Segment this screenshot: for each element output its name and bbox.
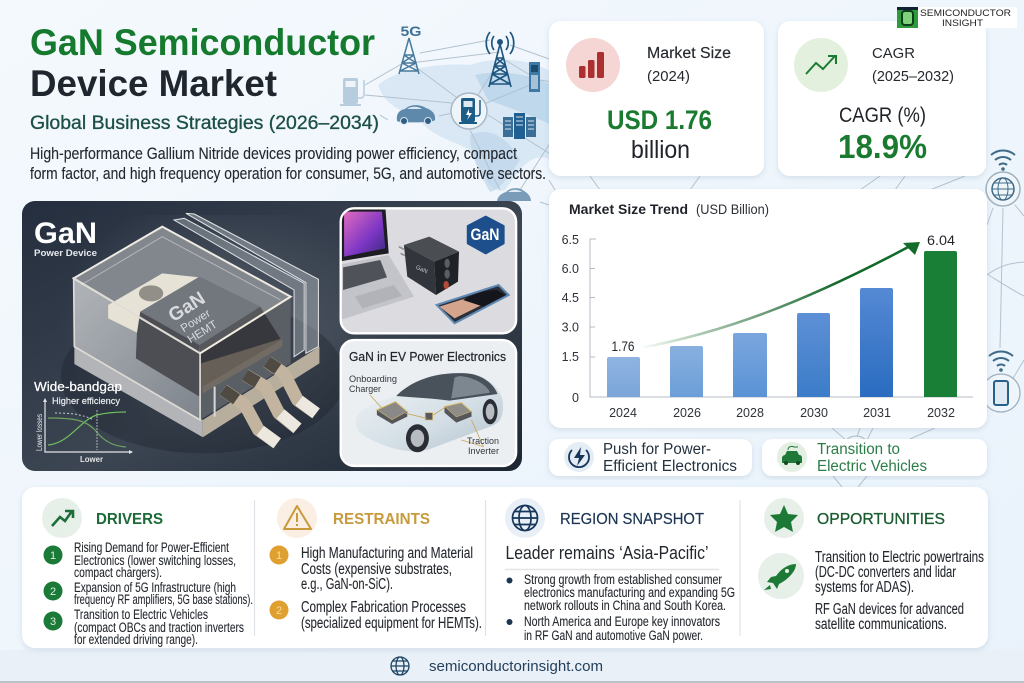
mini chart: wide-bandgap [34,380,133,464]
chip markings: Power [179,308,213,335]
driver list [74,540,253,647]
trend arrow [640,242,920,348]
icon: kiosk [529,62,540,92]
pill: electric vehicles: Transition to [817,441,900,458]
icon: rocket [758,553,804,599]
card: market size: USD 1.76 [607,105,712,135]
panel: consumer charger photo [338,207,516,333]
footer band [0,650,1024,683]
restraint list: Complex Fabrication Processes [301,599,466,616]
icon: car behind panel [497,188,531,201]
column: opportunities: satellite communications. [815,616,947,633]
partial hub behind chart [842,436,870,464]
pill: power-efficient electronics [549,439,752,476]
column: opportunities: RF GaN devices for advanced [815,601,964,618]
data labels [612,233,956,354]
title: GaN Semiconductor [30,22,375,63]
icon: wifi and globe node [986,150,1020,206]
logo: SEMICONDUCTOR [920,8,1011,19]
title [30,22,375,104]
description: form factor, and high frequency operation for consumer, 5G, and automotive sectors. [30,164,546,183]
icon: wifi and phone node [982,352,1020,412]
y axis labels: 0 [572,391,579,405]
subtitle: Global Business Strategies (2026–2034) [30,113,379,134]
restraint list: High Manufacturing and Material [301,545,473,562]
card: market size: Market Size [647,45,731,62]
badge and charger text: GaN [415,265,428,275]
restraint list: Costs (expensive substrates, [301,561,452,578]
panel: GaN power device visual [22,201,522,471]
driver list: Transition to Electric Vehicles [74,607,208,622]
pill: power-efficient electronics: Efficient Electronics [603,458,737,475]
chart card: market size trend: (USD Billion) [696,202,769,217]
panel: GaN in EV power electronics: Onboarding [349,374,397,385]
card: CAGR: (2025–2032) [872,68,954,85]
footer band: semiconductorinsight.com [429,659,603,675]
chip markings: GaN [165,288,209,327]
x axis labels [609,406,955,420]
number badges: 3 [50,616,56,628]
mini chart: wide-bandgap: Lower [80,454,104,464]
column: region snapshot: Strong growth from established consumer [524,572,722,587]
column: opportunities: systems for ADAS). [815,579,914,596]
data labels: 1.76 [612,339,634,354]
mini chart: wide-bandgap: Higher efficiency [52,396,120,407]
column: opportunities: OPPORTUNITIES [817,511,945,528]
card: CAGR: CAGR (%) [839,104,926,127]
icon: bar signal [566,38,620,92]
icon: 5G tower [399,23,422,74]
description: High-performance Gallium Nitride devices providing power efficiency, compact [30,144,517,163]
y axis labels: 3.0 [562,320,579,334]
driver list: compact chargers). [74,565,162,580]
panel: GaN in EV power electronics: Traction [467,436,499,447]
x axis labels: 2026 [673,406,701,420]
column: region snapshot: REGION SNAPSHOT [560,511,705,528]
column: region snapshot: North America and Europe key innovators [524,614,720,629]
panel: GaN in EV power electronics: Inverter [468,446,499,457]
y axis labels: 6.0 [562,262,579,276]
badge and charger text: GaN [470,225,500,244]
icon: electric car [777,442,807,472]
panel: GaN in EV power electronics: Charger [349,384,381,395]
driver list: Rising Demand for Power-Efficient [74,540,229,555]
icon: globe [505,498,545,538]
column: region snapshot: Leader remains ‘Asia-Pacific’ [506,542,708,563]
driver list: Electronics (lower switching losses, [74,553,236,568]
icon: charging hub [451,93,487,129]
title: Device Market [30,63,277,104]
chart card: market size trend: Market Size Trend [569,201,688,217]
driver list: (compact OBCs and traction inverters [74,620,244,635]
card: CAGR: CAGR [872,45,915,62]
column: restraints [270,498,482,632]
restraint list: e.g., GaN-on-SiC). [301,576,393,593]
pill: electric vehicles: Electric Vehicles [817,458,927,475]
mini chart: wide-bandgap: Wide-bandgap [34,380,122,394]
y axis labels: 4.5 [562,291,579,305]
number badges: 1 [50,550,56,562]
column: opportunities [758,498,984,633]
axes [590,239,973,397]
column: restraints: RESTRAINTS [333,511,430,528]
logo: INSIGHT [942,18,983,29]
column: region snapshot: electronics manufacturing and expanding 5G [524,585,735,600]
x axis labels: 2030 [800,406,828,420]
pill: electric vehicles [762,439,987,476]
bars [607,251,957,397]
column: opportunities: (DC-DC converters and lidar [815,564,956,581]
description [30,144,546,183]
background network map [365,40,1024,487]
column: region snapshot: network rollouts in China and South Korea. [524,598,726,613]
badge and charger text [415,225,500,275]
restraint list: (specialized equipment for HEMTs). [301,615,482,632]
driver list: frequency RF amplifiers, 5G base stations). [74,592,253,607]
text: GaN Power Device: GaN [34,217,97,250]
icon: trending up [42,498,82,538]
x axis labels: 2024 [609,406,637,420]
chart card: market size trend [549,189,987,428]
number badges [44,546,62,630]
illustration: GaN HEMT package [61,213,345,453]
icon: growth arrow [794,38,848,92]
x axis labels: 2028 [736,406,764,420]
icon: 5G tower: 5G [400,23,422,39]
card: CAGR [778,21,986,176]
restraint list [301,545,482,632]
icon: antenna tower [486,32,514,87]
icon: globe [391,657,409,675]
y axis labels: 6.5 [562,233,579,247]
icon: faded charging pump [340,78,364,105]
column: drivers [42,498,253,647]
driver list: for extended driving range). [74,632,198,647]
card: market size [549,21,764,176]
number badges: 2 [50,586,56,598]
text: GaN Power Device: Power Device [34,248,97,259]
column: region snapshot: in RF GaN and automotive GaN power. [524,628,703,643]
data labels: 6.04 [927,233,956,248]
column: region snapshot [505,498,735,643]
card: CAGR: 18.9% [838,128,927,165]
panel: GaN in EV power electronics: GaN in EV Power Electronics [349,350,506,364]
column: restraints: 1 [276,550,282,562]
icon: bolt [564,442,594,472]
panel: GaN in EV power electronics [341,340,516,466]
driver list: Expansion of 5G Infrastructure (high [74,580,236,595]
card: market size: billion [631,136,690,164]
icon: warning [277,498,317,538]
card: market size: (2024) [647,68,690,85]
y axis labels: 1.5 [562,350,579,364]
logo [897,7,1017,29]
mini chart: wide-bandgap: Lower losses [34,414,44,451]
column: restraints: 2 [276,605,282,617]
chip markings [165,288,222,348]
icon: car [397,105,435,124]
x axis labels: 2031 [863,406,891,420]
chip markings: HEMT [186,319,220,346]
column: drivers: DRIVERS [96,511,163,528]
pill: power-efficient electronics: Push for Power- [603,441,711,458]
icon: star [764,498,804,538]
icon: servers [503,113,536,139]
x axis labels: 2032 [927,406,955,420]
panel: bottom summary card [22,487,988,648]
y axis labels [562,233,579,405]
